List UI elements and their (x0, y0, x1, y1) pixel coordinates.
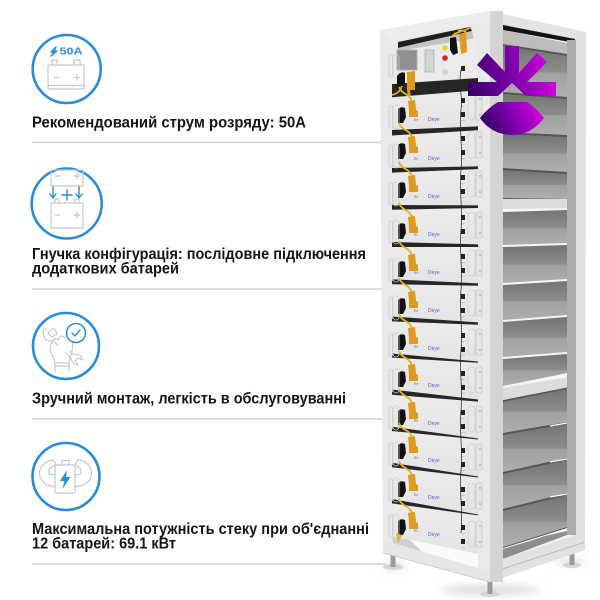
battery module 10 (389, 423, 482, 476)
icon: battery 50A (33, 35, 101, 103)
rack floor shadow (383, 559, 586, 595)
side shelves (503, 46, 567, 547)
battery module 11: B+ (414, 492, 420, 497)
rack feet (383, 549, 581, 597)
battery rack (380, 11, 586, 597)
icon: battery with strong arms (32, 443, 100, 510)
connector panel (425, 50, 434, 72)
front frame (380, 11, 503, 582)
battery module 1: Deye (428, 117, 440, 123)
battery module 1 (389, 87, 482, 130)
display (397, 50, 417, 70)
battery module 12: B+ (414, 528, 420, 533)
right side beams and column (490, 32, 586, 582)
rack base (383, 533, 490, 582)
battery module 5: B+ (414, 270, 420, 275)
panel: easy installation (32, 313, 346, 408)
panel: discharge current (32, 35, 306, 132)
battery module 4: B+ (414, 232, 420, 237)
heading: easy installation: Зручний монтаж, легкість в обслуговуванні (32, 390, 346, 408)
text: flexible configuration (32, 246, 366, 278)
battery module 10: Deye (428, 458, 440, 464)
top cables (450, 28, 470, 55)
battery module 6: Deye (428, 308, 440, 314)
battery module 9 (389, 389, 482, 438)
battery module 7: B+ (414, 344, 420, 349)
battery module 9: B+ (414, 418, 420, 423)
battery module 7 (389, 314, 482, 362)
panel: maximum power (32, 443, 369, 552)
battery module 2: B+ (414, 156, 420, 161)
battery module 4 (389, 203, 482, 244)
battery module 3: B+ (414, 194, 420, 199)
divider lines (32, 142, 386, 564)
battery module 6: B+ (414, 308, 420, 313)
battery module 5 (389, 241, 482, 283)
shelf highlights (550, 423, 567, 497)
battery module 8: B+ (414, 381, 420, 386)
battery module 8: Deye (428, 383, 440, 389)
text: flexible configuration: додаткових батарей (32, 260, 179, 278)
battery module 3: Deye (428, 194, 440, 200)
control module (389, 28, 478, 112)
battery module 7: Deye (428, 346, 440, 352)
battery module 2: Deye (428, 156, 440, 162)
heading: discharge current: Рекомендований струм розряду: 50А (32, 114, 306, 132)
battery module 9: Deye (428, 421, 440, 427)
shelf backing, dark joints (503, 44, 567, 548)
right side frame (490, 11, 586, 582)
text: maximum power: Максимальна потужність стеку при об'єднанні (32, 521, 369, 538)
battery module 12: Deye (428, 532, 440, 538)
battery module 8 (389, 351, 482, 400)
battery module 3 (389, 162, 482, 206)
text: flexible configuration: Гнучка конфігурація: послідовне підключення (32, 246, 366, 263)
battery module 11 (389, 461, 482, 514)
text: maximum power: 12 батарей: 69.1 кВт (32, 536, 176, 552)
icon: battery 50A: 50A (60, 46, 83, 58)
icon: hand with wrench and check (33, 313, 99, 379)
logo: purple asterisk mark (468, 46, 556, 135)
battery module 10: B+ (414, 455, 420, 460)
battery module 12 (389, 499, 482, 554)
battery module 5: Deye (428, 270, 440, 276)
battery module 11: Deye (428, 495, 440, 501)
text: maximum power (32, 521, 369, 552)
battery module 1: B+ (414, 117, 420, 122)
shelf floor opening (503, 531, 567, 559)
panel: flexible configuration (32, 168, 366, 278)
data cable (460, 70, 462, 533)
buttons (442, 45, 448, 74)
battery module 6 (389, 278, 482, 322)
battery module 2 (389, 123, 482, 168)
battery module 4: Deye (428, 232, 440, 238)
icon: two batteries in series (32, 168, 102, 238)
